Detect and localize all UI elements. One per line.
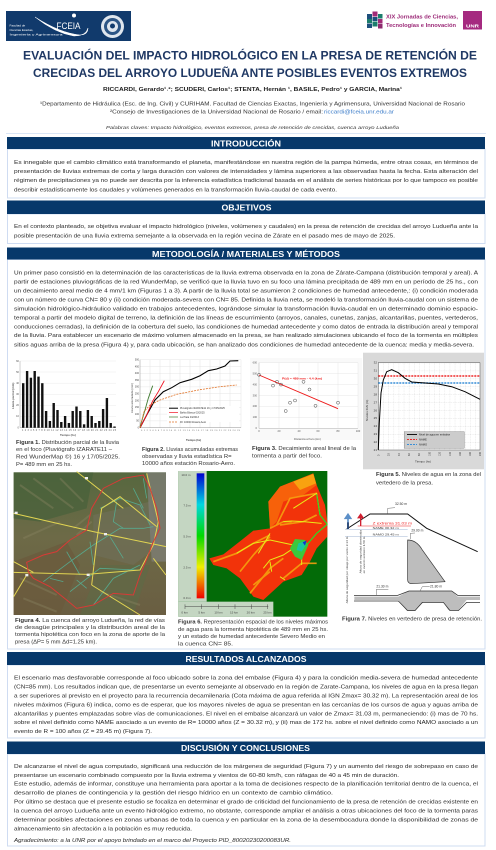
caption: figura 6: la cuenca CN= 85. (178, 641, 233, 647)
chart: figura 2 cumulative rainfall (130, 358, 241, 442)
logo: XIX Jornadas (367, 12, 459, 29)
chart: figura 1 bar chart: 60 (16, 359, 20, 363)
chart: figura 1 bar chart: 40 (16, 381, 20, 385)
panel: discusión (7, 742, 485, 846)
map: figura 6 water depth: 5 km (198, 611, 205, 615)
chart legend (404, 432, 464, 448)
chart: figura 1 bar chart (11, 359, 117, 437)
logo: XIX Jornadas: XIX Jornadas de Ciencias, (386, 14, 459, 20)
chart: figura 5 water levels: 0 (378, 454, 380, 456)
diagram: figura 7 dam section: Altura de seguridad disminuida (359, 529, 362, 573)
title: EVALUACIÓN DEL IMPACTO HIDROLÓGICO EN LA PRESA DE RETENCIÓN DE (23, 48, 477, 62)
caption: figura 1: P= 489 mm en 25 hs. (16, 462, 72, 468)
map: figura 4 basin (14, 472, 166, 615)
text: discusión: determinar posibles afectaciones en zonas urbanas de toda la cuenca y en particular en la zona de la desembocadura donde la disponibilidad de zonas de (14, 818, 478, 824)
chart: figura 3 scatter: Distancia al foco (km) (294, 437, 321, 441)
text: metodología: un decaimiento areal medio de 4 mm/1 km (Figuras 1 a 3). A partir de la lluvia total se asumieron 2 condiciones de humedad antecedente,: (i) condición moderada (14, 288, 478, 294)
chart: figura 3 scatter: 400 (253, 382, 258, 386)
chart: figura 5 water levels: 24 (374, 424, 377, 428)
affiliations (40, 102, 465, 116)
chart: figura 5 water levels: Tiempo (hs) (415, 460, 431, 464)
text: introducción: describir estadísticamente los caudales y volúmenes generados en la transformación lluvia-caudal de cada evento. (14, 187, 337, 193)
caption: figura 1: Figura 1. Distribución parcial de la lluvia (16, 440, 119, 446)
text: discusión: De alcanzarse el nivel de agua computado, significará una reducción de los márgenes de seguridad (Figura 7) y un aumento del riesgo de sobrepaso en caso de (14, 764, 478, 770)
heading: resultados: RESULTADOS ALCANZADOS (186, 654, 307, 664)
chart: figura 3 scatter: 80 (337, 429, 340, 433)
chart: figura 1 bar chart: Lluvia parcial (mm) (11, 383, 15, 409)
diagram: figura 7 dam section: 21.80 m (430, 585, 442, 589)
chart: figura 3 scatter: 20 (278, 429, 281, 433)
diagram: figura 7 dam section: 21.30 m (376, 585, 389, 589)
text: metodología: conducciones cerradas), la definición de la cobertura del suelo, las condiciones de humedad antecedente y como datos de entrada la distribución areal y temporal (14, 324, 478, 330)
text: discusión: desarrollo de planes de contingencia y la gestión del riesgo hídrico en un contexto de cambio climático. (14, 791, 333, 797)
map: figura 6 water depth: 0.0 m (183, 596, 191, 600)
chart: figura 3 scatter: 60 (317, 429, 320, 433)
map: figura 6 water depth: 0 km (181, 611, 188, 615)
chart: figura 2 cumulative rainfall: 50 (136, 420, 140, 423)
panel: objetivos (7, 200, 485, 244)
chart: figura 5 water levels (363, 353, 484, 469)
heading: introducción: INTRODUCCIÓN (211, 137, 281, 148)
diagram: figura 7 dam section (345, 502, 480, 611)
caption: figura 6: y un estado de humedad antecedente Severo Medio en (178, 634, 325, 640)
chart: figura 5 water levels: 20 (388, 453, 391, 456)
text: metodología: partir de estaciones pluviográficas de la red WunderMap, se verificó que la lluvia tuvo en su foco una lámina precipitada de 489 mm en un período de 25 hs., con (14, 280, 478, 286)
affiliations: riccardi@fceia.unr.edu.ar (324, 110, 394, 116)
logo: UNR (463, 11, 482, 30)
map: figura 6 water depth: 7.5 m (183, 504, 191, 508)
text: discusión: presentarse un escenario combinado compuesto por la lluvia extrema y vientos de 60-80 km/h, con ráfagas de 40 a 45 min de duración. (14, 773, 399, 779)
chart: figura 3 scatter: P(d) = 489 mm - 4.4 (km) (282, 377, 322, 381)
logo: FCEIA (6, 11, 131, 41)
caption: figura 2: observadas y lluvia estadística R= (142, 454, 232, 460)
text: metodología: simulación hidrológico-hidráulico validado en trabajos antecedentes, lográndose simular la transformación lluvia-caudal en un determinado dominio espacio- (14, 306, 478, 312)
logo: FCEIA: FCEIA (56, 21, 80, 31)
diagram: figura 7 dam section: NAME 30.32 m (373, 526, 399, 530)
text: metodología: sitios aguas arriba de la presa (Figura 4) y, para cada ubicación, se han analizado dos condiciones de humedad antecedente de la cuenca: media y media-severa. (14, 342, 474, 348)
chart: figura 2 cumulative rainfall: 400 (135, 372, 140, 375)
chart: figura 2 cumulative rainfall: 150 (135, 406, 140, 409)
chart legend (167, 406, 239, 424)
caption: figura 2: 10000 años estación Rosario-Aero. (142, 461, 235, 467)
caption: figura 4: Figura 4. La cuenca del arroyo Ludueña, la red de vías (15, 618, 165, 624)
panel: metodología (7, 248, 485, 649)
caption: figura 4: tormenta hipotética con foco en la zona de aporte de la (15, 632, 165, 638)
chart: figura 5 water levels: 21 (374, 448, 377, 452)
panel: resultados (7, 652, 485, 738)
chart: figura 2 cumulative rainfall: 100 (135, 413, 140, 416)
map: figura 6 water depth: 20 km (247, 611, 255, 615)
chart: figura 5 water levels: 140 (449, 451, 452, 456)
caption: figura 1: Red WunderMap ©) 16 y 17/05/2025. (16, 454, 120, 460)
caption: figura 1: en el foco (Pluviógrafo IZARATE11 – (16, 447, 112, 453)
chart legend: R= 10000 Rosario Aero (180, 421, 207, 424)
chart: figura 3 scatter: 600 (253, 360, 258, 364)
chart: figura 5 water levels: 30 (374, 377, 377, 381)
chart: figura 2 cumulative rainfall: 350 (135, 379, 140, 382)
caption: figura 5 (376, 472, 481, 486)
chart: figura 1 bar chart: Tiempo (hs) (60, 433, 76, 437)
chart: figura 2 cumulative rainfall: Lluvia acumulada (mm) (130, 383, 134, 413)
keywords: Palabras claves: Impacto hidrológico, eventos extremos, presa de retención de crecidas, cuenca arroyo Ludueña (106, 125, 399, 130)
chart: figura 1 bar chart: 1 2 3 4 5 6 7 8 9 10 11 12 13 14 15 16 17 18 19 20 21 22 23 24 25 (22, 430, 117, 432)
caption: figura 5: vertedero de la presa. (376, 480, 433, 486)
chart: figura 3 scatter: 200 (253, 404, 258, 408)
chart: figura 1 bar chart: 50 (16, 370, 20, 374)
chart: figura 1 bar chart: 20 (16, 403, 20, 407)
caption: figura 1 (16, 440, 120, 468)
text: resultados (14, 676, 478, 735)
chart: figura 5 water levels: 180 (469, 451, 472, 456)
chart: figura 5 water levels: 26 (374, 408, 377, 412)
diagram: figura 7 dam section: NAMO 29.45 m (373, 532, 399, 536)
diagram: figura 7 dam section: 32.50 m (395, 502, 407, 506)
text: introducción: presentación de lluvias extremas de corta y larga duración con valores de intensidades y lámina superiores a las observadas hasta la fecha. Esta alteración del (14, 169, 478, 175)
chart: figura 3 scatter: 500 (253, 372, 258, 376)
heading: objetivos: OBJETIVOS (222, 202, 272, 212)
caption: figura 4: presa (ΔP= 5 mm Δd=1.25 km). (15, 639, 97, 645)
logo: XIX Jornadas: Tecnologías e Innovación (386, 23, 456, 29)
text: objetivos: En el contexto planteado, se objetiva evaluar el impacto hidrológico (niveles, volúmenes y caudales) en la presa de retención de crecidas del arroyo Ludueña ante la (14, 224, 478, 230)
chart legend: Nivel de agua en embalse (419, 432, 451, 436)
chart: figura 2 cumulative rainfall: 250 (135, 392, 140, 396)
text: introducción (14, 160, 478, 193)
chart: figura 2 cumulative rainfall: 0 (138, 426, 140, 430)
chart: figura 5 water levels: 27 (374, 400, 377, 404)
text: introducción: Es innegable que el cambio climático está transformando el planeta, manifestándose en nuestra región de la pampa húmeda, entre otras cosas, en términos de (14, 160, 478, 166)
chart: figura 5 water levels: 32 (374, 361, 377, 365)
chart: figura 2 cumulative rainfall: 450 (135, 365, 140, 368)
caption: figura 6: de agua para la tormenta hipotética de 489 mm en 25 hs. (178, 627, 328, 633)
text: resultados: niveles máximos (Figura 6) indica, como es de esperar, que los mayores niveles de agua se presentan en las cercanías de los cursos de agua y aguas arriba de (14, 702, 478, 708)
caption: figura 2 (142, 447, 238, 467)
map: figura 6 water depth: 2.5 m (183, 566, 191, 570)
text: resultados: evento de R = 100 años (Z = 29.45 m) (Figura 7). (14, 729, 152, 735)
map: figura 6 water depth: 10.0 m (181, 473, 191, 477)
text: metodología: Un primer paso consistió en la determinación de las características de la lluvia extrema observada en la zona de Zárate-Campana (distribución temporal y areal). A (14, 270, 479, 276)
text: metodología: de la lluvia. Para establecer un escenario de máximo volumen almacenado en la presa, se han realizado simulaciones ubicando el foco de la tormenta en múltiples (14, 333, 478, 339)
caption: figura 6 (178, 619, 328, 647)
chart: figura 3 scatter: 40 (298, 429, 301, 433)
chart: figura 3 scatter: 300 (253, 394, 258, 398)
caption: figura 4: de desagüe principales y la distribución areal de la (15, 625, 165, 631)
caption: figura 6: Figura 6. Representación espacial de los niveles máximos (178, 619, 328, 625)
chart: figura 2 cumulative rainfall: Tiempo (hs) (186, 438, 201, 442)
chart legend: La Plata 04/2013 (180, 416, 200, 419)
caption: figura 3 (252, 446, 356, 459)
chart: figura 5 water levels: 23 (374, 432, 377, 436)
diagram: figura 7 dam section: en evento extremo 1.50 m (363, 537, 366, 573)
chart: figura 5 water levels: 60 (408, 453, 411, 456)
diagram: figura 7 dam section: 29.00 m (411, 528, 424, 532)
chart: figura 5 water levels: 120 (439, 451, 442, 456)
caption: figura 3: tormenta a partir del foco. (252, 453, 322, 459)
text: resultados: El escenario mas desfavorable corresponde al foco ubicado sobre la zona del embalse (Figura 4) y para la condición media-severa de humedad antecedente (14, 676, 478, 682)
text: objetivos: posible presentación de una lluvia extrema semejante a la observada en la región vecina de Zárate en el pasado mes de mayo de 2025. (14, 233, 395, 239)
diagram: figura 7 dam section: Z extrema 31.03 m (373, 521, 412, 525)
title: CRECIDAS DEL ARROYO LUDUEÑA ANTE POSIBLES EVENTOS EXTREMOS (33, 65, 467, 80)
chart: figura 2 cumulative rainfall: 0 1 2 3 4 5 6 7 8 9 10 11 12 13 14 15 16 17 18 19 20 21 22 23 24 25 (141, 430, 241, 432)
caption: figura 4 (15, 618, 165, 645)
chart: figura 5 water levels: 31 (374, 369, 377, 373)
chart legend: NAMO (419, 442, 427, 446)
text: discusión: Este estudio, además de informar, constituye una herramienta para aportar a la toma de decisiones respecto de la planificación territorial dentro de la cuenca, el (14, 782, 478, 788)
chart: figura 3 scatter: 100 (356, 429, 361, 433)
diagram: figura 7 dam section: Altura de seguridad por oleaje por viento 2.14 m (346, 537, 349, 603)
heading: discusión: DISCUSIÓN Y CONCLUSIONES (181, 742, 310, 753)
chart: figura 5 water levels: 80 (418, 453, 421, 456)
chart: figura 3 scatter: 100 (253, 415, 258, 419)
chart: figura 2 cumulative rainfall: 300 (135, 386, 140, 389)
chart: figura 3 scatter: 0 (256, 426, 258, 430)
map: figura 6 water depth: 25 km (263, 611, 272, 615)
chart: figura 5 water levels: 160 (459, 451, 462, 456)
chart: figura 5 water levels: 29 (374, 384, 377, 388)
text: discusión: Agradecimiento: a la UNR por el apoyo brindado en el marco del Proyecto PID_80020230200083UR. (13, 838, 291, 844)
chart legend: NAME (419, 437, 427, 441)
chart: figura 5 water levels: Niveles IGN (m) (365, 400, 369, 421)
text: metodología: con un número de curva CN= 80 y (ii) condición moderada-severa con CN= 85. Definida la lluvia neta, se modeló la transformación lluvia-caudal con un sistema de (14, 298, 478, 304)
chart: figura 1 bar chart: 30 (16, 392, 20, 396)
panel: introducción (7, 137, 485, 198)
chart legend: Bahía Blanca 03/2025 (180, 412, 205, 414)
chart: figura 5 water levels: 200 (479, 451, 482, 456)
text: objetivos (14, 224, 478, 239)
chart: figura 5 water levels: 22 (374, 440, 377, 444)
chart: figura 5 water levels: 100 (428, 451, 431, 456)
caption: figura 3: Figura 3. Decaimiento areal lineal de la (252, 446, 356, 452)
chart: figura 1 bar chart: 0 (18, 426, 20, 430)
chart: figura 1 bar chart: 10 (16, 414, 20, 418)
title (23, 48, 477, 80)
chart: figura 2 cumulative rainfall: 200 (135, 399, 140, 402)
text: resultados: sobre el nivel definido como NAME asociado a un evento de R= 10000 años (Z = 30.32 m), y (ii) mas de 172 hs. sobre el nivel definido como NAMO asociado a un (14, 720, 478, 726)
text: resultados: a ser superiores al previsto en el proyecto para la recurrencia decamilenaria (Cota máxima de agua referida al IGN Zmax= 30.32 m). La representación areal de los (14, 693, 478, 699)
affiliations: ²Consejo de Investigaciones de la Universidad Nacional de Rosario / email: (110, 110, 323, 116)
affiliations: ¹Departamento de Hidráulica (Esc. de Ing. Civil) y CURIHAM. Facultad de Ciencias Exactas, Ingeniería y Agrimensura, Universidad Nacional de Rosario (40, 102, 465, 108)
text: resultados: alcantarillas y puentes emplazadas sobre vías de comunicaciones. El nivel en el embalse alcanzará un valor de Zmax= 31.03 m, permaneciendo: (i) mas de 70 hs. (14, 711, 478, 717)
text: discusión: almacenamiento sin afectación a la población es muy reducida. (14, 827, 192, 833)
map: figura 6 water depth (178, 471, 327, 617)
text: resultados: (CN=85 mm). Los resultados indican que, de presentarse un evento semejante al observado en la región de Zarate-Campana, los niveles de agua en la presa llegan (14, 685, 478, 691)
chart: figura 3 scatter (250, 358, 362, 441)
text: introducción: régimen de precipitaciones ya no puede ser descrita por la inferencia estadística tradicional basada en el análisis de series históricas por lo que tampoco es posible (14, 178, 478, 184)
chart legend: Pluviógrafo IZARATE11 16 y 17/05/2025 (180, 407, 225, 410)
caption: figura 7: Figura 7. Niveles en vertedero de presa de retención. (342, 617, 482, 623)
map: figura 6 water depth: 5.0 m (183, 535, 191, 539)
text: metodología: temporal a partir del modelo digital de terreno, la definición de las líneas de escurrimiento (arroyos, canales, cunetas, zanjas, alcantarillas, puentes, vertederos, (14, 316, 478, 322)
map: figura 6 water depth: 15 km (230, 611, 239, 615)
heading: metodología: METODOLOGÍA / MATERIALES Y MÉTODOS (152, 249, 340, 259)
logo: FCEIA: Ciencias Exactas, (10, 28, 34, 32)
caption: figura 5: Figura 5. Niveles de agua en la zona del (376, 472, 481, 478)
chart: figura 5 water levels: 28 (374, 392, 377, 396)
logo: FCEIA: Ingeniería y Agrimensura (10, 32, 63, 36)
text: discusión: la cuenca del arroyo Ludueña ante un evento hidrológico extremo, no obstante, corresponde ampliar el análisis a otras ubicaciones del foco de la tormenta paras (14, 809, 478, 815)
authors: RICCARDI, Gerardo¹˒²; SCUDERI, Carlos¹; STENTA, Hernán ¹, BASILE, Pedro¹ y GARCIA, Marina¹ (103, 86, 402, 93)
map: figura 6 water depth: 10 km (214, 611, 223, 615)
chart: figura 5 water levels: 25 (374, 416, 377, 420)
text: discusión: Por último se destaca que el presente estudio se focaliza en determinar el grado de criticidad del funcionamiento de la presa de retención de crecidas existente en (14, 800, 478, 806)
text: discusión (13, 764, 478, 844)
logo: UNR: UNR (466, 24, 480, 28)
chart: figura 5 water levels: 40 (398, 453, 401, 456)
chart: figura 2 cumulative rainfall: 500 (135, 358, 140, 362)
chart: figura 3 scatter: 0 (258, 429, 260, 433)
logo: FCEIA: Facultad de (10, 24, 26, 28)
caption: figura 2: Figura 2. Lluvias acumuladas extremas (142, 447, 238, 453)
text: metodología (14, 270, 479, 348)
